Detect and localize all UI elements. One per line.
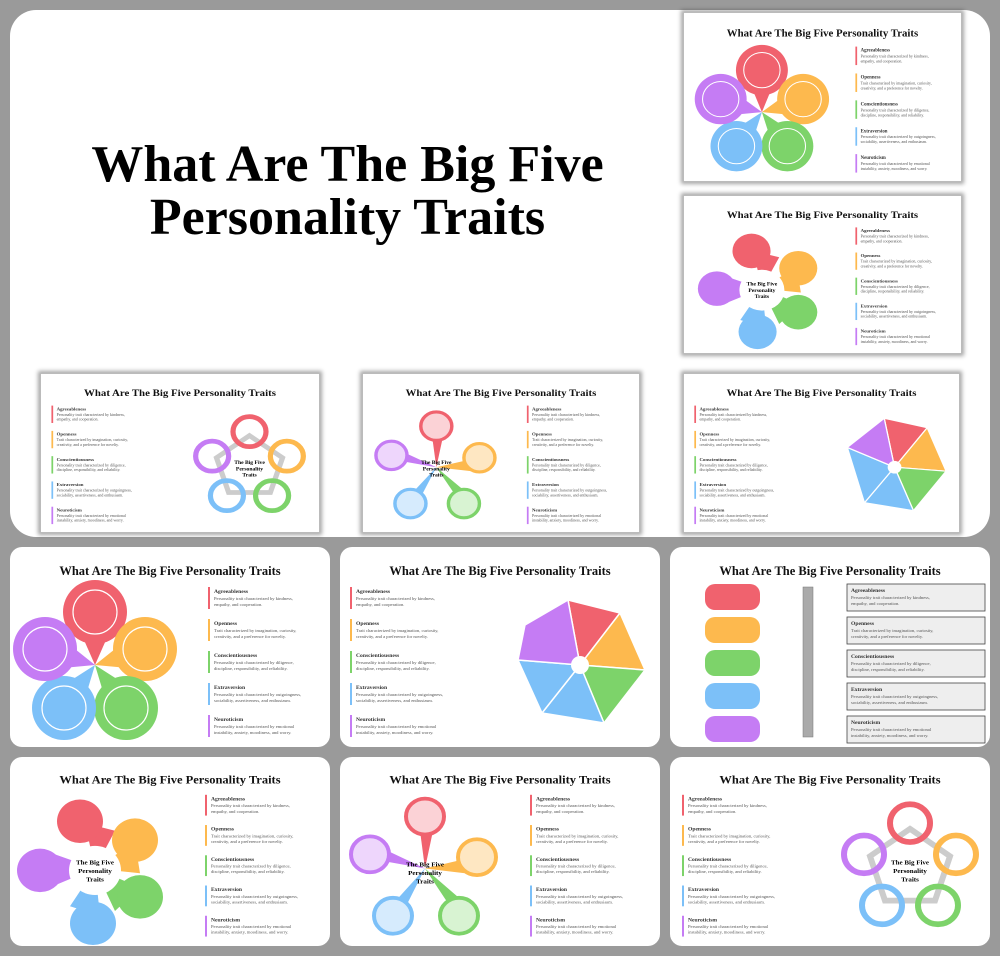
thumbnail 3: rings: What Are The Big Five Personality Traits bbox=[84, 389, 276, 399]
card 2: pentagon: sociability, assertiveness, and enthusiasm. bbox=[356, 698, 433, 704]
card 2: pentagon: Openness bbox=[356, 621, 380, 627]
thumbnail 1: petals bbox=[683, 12, 962, 182]
card 2: pentagon bbox=[340, 547, 660, 747]
card 6: rings: sociability, assertiveness, and enthusiasm. bbox=[688, 900, 765, 905]
card 2: pentagon: Personality trait characterized by kindness, bbox=[356, 596, 435, 602]
thumbnail 2: swirl: Traits bbox=[755, 294, 769, 300]
card 5: tailed circles: Extraversion bbox=[536, 887, 567, 893]
thumbnail 2: swirl: creativity, and a preference for novelty. bbox=[861, 265, 923, 269]
card 3: tabs: Conscientiousness bbox=[851, 654, 895, 660]
thumbnail 3: rings: Neuroticism bbox=[57, 509, 82, 513]
card 4: swirl: Personality bbox=[78, 868, 112, 875]
card 6: rings: creativity, and a preference for novelty. bbox=[688, 839, 760, 845]
thumbnail 1: petals: Personality trait characterized by outgoingness, bbox=[861, 135, 936, 140]
card 6: rings: Neuroticism bbox=[688, 918, 718, 923]
thumbnail 2: swirl: Conscientiousness bbox=[861, 279, 898, 283]
thumbnail 2: swirl: Personality trait characterized by emotional bbox=[861, 335, 930, 339]
thumbnail 2: swirl: The Big Five bbox=[747, 282, 778, 287]
thumbnail 5: pentagon: Personality trait characterized by kindness, bbox=[699, 413, 767, 418]
card 6: rings: Personality trait characterized by kindness, bbox=[688, 803, 767, 809]
card 3: tabs: instability, anxiety, moodiness, and worry. bbox=[851, 733, 928, 739]
thumbnail 5: pentagon: Neuroticism bbox=[699, 508, 725, 512]
thumbnail 2: swirl: sociability, assertiveness, and enthusiasm. bbox=[861, 315, 927, 320]
card 2: pentagon: Neuroticism bbox=[356, 717, 385, 723]
thumbnail 3: rings: empathy, and cooperation. bbox=[57, 418, 99, 423]
card 5: tailed circles: sociability, assertiveness, and enthusiasm. bbox=[536, 900, 613, 905]
thumbnail 4: tailed circles: Conscientiousness bbox=[532, 458, 570, 463]
main title: What Are The Big Five bbox=[91, 136, 604, 193]
card 1: petals: Extraversion bbox=[214, 685, 246, 691]
card 5: tailed circles: Personality trait characterized by kindness, bbox=[536, 803, 615, 809]
thumbnail 2: swirl bbox=[683, 195, 962, 354]
thumbnail 3: rings: Conscientiousness bbox=[57, 458, 94, 463]
thumbnail 3: rings: Personality trait characterized by emotional bbox=[57, 514, 126, 518]
thumbnail 4: tailed circles: empathy, and cooperation. bbox=[532, 418, 574, 423]
card 5: tailed circles: Neuroticism bbox=[536, 918, 566, 923]
card 2: pentagon: creativity, and a preference for novelty. bbox=[356, 634, 428, 640]
thumbnail 3: rings: Agreeableness bbox=[57, 407, 86, 412]
thumbnail 5: pentagon: What Are The Big Five Personality Traits bbox=[727, 388, 916, 399]
card 2: pentagon: discipline, responsibility, and reliability. bbox=[356, 666, 430, 672]
card 5: tailed circles: empathy, and cooperation. bbox=[536, 809, 584, 815]
thumbnail 1: petals: instability, anxiety, moodiness, and worry. bbox=[861, 167, 927, 172]
card 4: swirl: Conscientiousness bbox=[211, 857, 254, 863]
card 1: petals bbox=[10, 547, 330, 747]
thumbnail 3: rings: creativity, and a preference for novelty. bbox=[57, 443, 119, 448]
card 3: tabs: empathy, and cooperation. bbox=[851, 601, 899, 607]
thumbnail 1: petals: Personality trait characterized by diligence, bbox=[861, 108, 929, 113]
card 4: swirl: Personality trait characterized by kindness, bbox=[211, 803, 290, 809]
card 4: swirl: Personality trait characterized by diligence, bbox=[211, 864, 291, 870]
thumbnail 4: tailed circles: Personality trait characterized by outgoingness, bbox=[532, 489, 607, 494]
thumbnail 3: rings: Extraversion bbox=[57, 483, 84, 488]
card 3: tabs: What Are The Big Five Personality Traits bbox=[719, 564, 941, 578]
card 6: rings: Conscientiousness bbox=[688, 857, 731, 863]
thumbnail 4: tailed circles: Trait characterized by imagination, curiosity, bbox=[532, 438, 603, 443]
thumbnail 1: petals: Extraversion bbox=[861, 129, 888, 134]
thumbnail 2: swirl: empathy, and cooperation. bbox=[861, 239, 903, 244]
card 1: petals: Agreeableness bbox=[214, 589, 249, 595]
thumbnail 1: petals: Personality trait characterized by kindness, bbox=[861, 55, 929, 59]
thumbnail 1: petals: Agreeableness bbox=[861, 49, 890, 54]
thumbnail 5: pentagon: Personality trait characterized by outgoingness, bbox=[699, 489, 774, 494]
thumbnail 3: rings: Traits bbox=[242, 473, 257, 479]
thumbnail 5: pentagon: discipline, responsibility, and reliability. bbox=[699, 468, 763, 473]
card 5: tailed circles: instability, anxiety, moodiness, and worry. bbox=[536, 930, 613, 936]
card 3: tabs: Trait characterized by imagination, curiosity, bbox=[851, 628, 933, 634]
card 4: swirl: Agreeableness bbox=[211, 797, 245, 802]
card 1: petals: discipline, responsibility, and reliability. bbox=[214, 666, 288, 672]
thumbnail 2: swirl: What Are The Big Five Personality Traits bbox=[727, 210, 918, 221]
card 6: rings: Extraversion bbox=[688, 887, 719, 893]
card 6: rings: Openness bbox=[688, 827, 711, 833]
thumbnail 5: pentagon: sociability, assertiveness, and enthusiasm. bbox=[699, 494, 766, 498]
thumbnail 1: petals: creativity, and a preference for novelty. bbox=[861, 86, 923, 91]
card 6: rings: empathy, and cooperation. bbox=[688, 809, 736, 815]
card 3: tabs: creativity, and a preference for novelty. bbox=[851, 634, 923, 640]
card 4: swirl bbox=[10, 757, 330, 946]
thumbnail 2: swirl: discipline, responsibility, and reliability. bbox=[861, 290, 924, 294]
card 5: tailed circles: Personality bbox=[408, 870, 442, 877]
thumbnail 5: pentagon: Conscientiousness bbox=[699, 457, 737, 462]
card 4: swirl: Personality trait characterized by emotional bbox=[211, 924, 292, 929]
thumbnail 5: pentagon: Openness bbox=[699, 432, 719, 437]
thumbnail 2: swirl: instability, anxiety, moodiness, and worry. bbox=[861, 340, 928, 345]
card 3: tabs: Personality trait characterized by emotional bbox=[851, 727, 932, 732]
card 4: swirl: Traits bbox=[86, 877, 104, 884]
card 5: tailed circles bbox=[340, 757, 660, 946]
thumbnail 4: tailed circles: Personality trait characterized by kindness, bbox=[532, 413, 600, 418]
thumbnail 2: swirl: Personality bbox=[748, 288, 776, 294]
thumbnail 1: petals: discipline, responsibility, and reliability. bbox=[861, 113, 924, 118]
thumbnail 4: tailed circles: The Big Five bbox=[421, 460, 452, 466]
card 1: petals: Personality trait characterized by emotional bbox=[214, 724, 295, 729]
card 4: swirl: sociability, assertiveness, and enthusiasm. bbox=[211, 900, 288, 905]
card 2: pentagon: instability, anxiety, moodiness, and worry. bbox=[356, 730, 433, 736]
thumbnail 4: tailed circles: Personality bbox=[423, 467, 450, 472]
card 6: rings: discipline, responsibility, and reliability. bbox=[688, 869, 762, 875]
card 6: rings: Personality trait characterized by emotional bbox=[688, 924, 769, 929]
thumbnail 4: tailed circles: instability, anxiety, moodiness, and worry. bbox=[532, 519, 599, 524]
card 5: tailed circles: Personality trait characterized by outgoingness, bbox=[536, 894, 623, 900]
card 5: tailed circles: Traits bbox=[416, 879, 434, 886]
card 6: rings: Personality bbox=[893, 868, 927, 875]
card 1: petals: Openness bbox=[214, 621, 238, 627]
thumbnail 3: rings bbox=[40, 373, 320, 533]
card 3: tabs: Extraversion bbox=[851, 687, 883, 693]
card 6: rings: Agreeableness bbox=[688, 797, 722, 802]
card 1: petals: Personality trait characterized by diligence, bbox=[214, 660, 294, 666]
thumbnail 5: pentagon: empathy, and cooperation. bbox=[699, 418, 741, 423]
thumbnail 4: tailed circles: Personality trait characterized by diligence, bbox=[532, 464, 601, 468]
card 5: tailed circles: Conscientiousness bbox=[536, 857, 579, 863]
card 2: pentagon: Personality trait characterized by outgoingness, bbox=[356, 692, 443, 698]
card 3: tabs: Neuroticism bbox=[851, 720, 880, 726]
thumbnail 4: tailed circles: creativity, and a preference for novelty. bbox=[532, 443, 594, 448]
card 1: petals: Conscientiousness bbox=[214, 653, 258, 659]
thumbnail 2: swirl: Extraversion bbox=[861, 304, 888, 308]
thumbnail 2: swirl: Agreeableness bbox=[861, 228, 890, 233]
card 6: rings: Personality trait characterized by outgoingness, bbox=[688, 894, 775, 900]
card 1: petals: Personality trait characterized by kindness, bbox=[214, 596, 293, 602]
card 4: swirl: Personality trait characterized by outgoingness, bbox=[211, 894, 298, 900]
card 1: petals: Neuroticism bbox=[214, 717, 243, 723]
main panel bbox=[10, 10, 990, 537]
thumbnail 4: tailed circles bbox=[362, 373, 640, 533]
card 3: tabs: discipline, responsibility, and reliability. bbox=[851, 667, 925, 673]
thumbnail 5: pentagon: Trait characterized by imagination, curiosity, bbox=[699, 438, 770, 443]
thumbnail 3: rings: Personality trait characterized by outgoingness, bbox=[57, 489, 132, 494]
card 5: tailed circles: Personality trait characterized by emotional bbox=[536, 924, 617, 929]
thumbnail 1: petals: Personality trait characterized by emotional bbox=[861, 162, 930, 166]
main title: Personality Traits bbox=[150, 189, 545, 246]
card 6: rings: Traits bbox=[901, 877, 919, 884]
thumbnail 3: rings: discipline, responsibility, and reliability. bbox=[57, 468, 120, 473]
card 4: swirl: Neuroticism bbox=[211, 918, 241, 923]
card 5: tailed circles: discipline, responsibility, and reliability. bbox=[536, 869, 610, 875]
thumbnail 5: pentagon: Extraversion bbox=[699, 482, 727, 487]
card 3: tabs: sociability, assertiveness, and enthusiasm. bbox=[851, 700, 928, 706]
thumbnail 3: rings: Personality bbox=[236, 467, 263, 472]
thumbnail 1: petals: Conscientiousness bbox=[861, 102, 898, 107]
card 4: swirl: Openness bbox=[211, 827, 234, 833]
thumbnail 3: rings: sociability, assertiveness, and enthusiasm. bbox=[57, 494, 123, 498]
thumbnail 3: rings: Personality trait characterized by diligence, bbox=[57, 464, 126, 468]
card 1: petals: empathy, and cooperation. bbox=[214, 602, 262, 608]
card 6: rings: The Big Five bbox=[891, 860, 929, 867]
card 6: rings bbox=[670, 757, 990, 946]
card 2: pentagon: Personality trait characterized by emotional bbox=[356, 724, 437, 729]
main title bbox=[91, 136, 604, 246]
thumbnail 2: swirl: Openness bbox=[861, 253, 881, 258]
card 2: pentagon: Personality trait characterized by diligence, bbox=[356, 660, 436, 666]
thumbnail 4: tailed circles: Extraversion bbox=[532, 483, 559, 488]
thumbnail 4: tailed circles: What Are The Big Five Personality Traits bbox=[406, 388, 596, 399]
thumbnail 1: petals: Neuroticism bbox=[861, 156, 886, 161]
card 2: pentagon: Agreeableness bbox=[356, 589, 391, 595]
thumbnail 4: tailed circles: Traits bbox=[429, 473, 443, 479]
thumbnail 5: pentagon bbox=[683, 373, 960, 533]
card 1: petals: Trait characterized by imagination, curiosity, bbox=[214, 628, 296, 634]
card 1: petals: What Are The Big Five Personality Traits bbox=[59, 564, 281, 578]
thumbnail 4: tailed circles: discipline, responsibility, and reliability. bbox=[532, 468, 596, 473]
thumbnail 2: swirl: Personality trait characterized by kindness, bbox=[861, 235, 929, 240]
card 4: swirl: Trait characterized by imagination, curiosity, bbox=[211, 833, 293, 839]
thumbnail 1: petals: Trait characterized by imagination, curiosity, bbox=[861, 81, 932, 86]
thumbnail 5: pentagon: instability, anxiety, moodiness, and worry. bbox=[699, 519, 766, 524]
card 2: pentagon: Extraversion bbox=[356, 685, 388, 691]
thumbnail 2: swirl: Personality trait characterized by outgoingness, bbox=[861, 310, 936, 315]
thumbnail 1: petals: Openness bbox=[861, 76, 881, 80]
card 5: tailed circles: Trait characterized by imagination, curiosity, bbox=[536, 833, 618, 839]
thumbnail 5: pentagon: creativity, and a preference for novelty. bbox=[699, 443, 761, 448]
thumbnail 1: petals: empathy, and cooperation. bbox=[861, 60, 902, 65]
card 5: tailed circles: Agreeableness bbox=[536, 797, 570, 802]
card 4: swirl: instability, anxiety, moodiness, and worry. bbox=[211, 930, 288, 936]
card 6: rings: What Are The Big Five Personality Traits bbox=[719, 773, 941, 786]
thumbnail 1: petals: sociability, assertiveness, and enthusiasm. bbox=[861, 140, 927, 145]
thumbnail 1: petals: What Are The Big Five Personality Traits bbox=[727, 29, 918, 39]
card 4: swirl: discipline, responsibility, and reliability. bbox=[211, 869, 285, 875]
thumbnail 2: swirl: Trait characterized by imagination, curiosity, bbox=[861, 260, 932, 265]
thumbnail 4: tailed circles: Personality trait characterized by emotional bbox=[532, 514, 601, 518]
thumbnail 5: pentagon: Personality trait characterized by diligence, bbox=[699, 464, 768, 468]
card 2: pentagon: empathy, and cooperation. bbox=[356, 602, 404, 608]
card 5: tailed circles: Personality trait characterized by diligence, bbox=[536, 864, 616, 870]
card 6: rings: Personality trait characterized by diligence, bbox=[688, 864, 768, 870]
card 5: tailed circles: What Are The Big Five Personality Traits bbox=[389, 773, 611, 786]
card 4: swirl: The Big Five bbox=[76, 860, 114, 867]
card 4: swirl: What Are The Big Five Personality Traits bbox=[59, 773, 281, 786]
card 3: tabs bbox=[670, 547, 990, 747]
card 2: pentagon: What Are The Big Five Personality Traits bbox=[389, 564, 611, 578]
card 1: petals: Personality trait characterized by outgoingness, bbox=[214, 692, 301, 698]
card 5: tailed circles: The Big Five bbox=[406, 862, 444, 869]
thumbnail 2: swirl: Personality trait characterized by diligence, bbox=[861, 285, 930, 290]
thumbnail 5: pentagon: Agreeableness bbox=[699, 407, 729, 411]
card 5: tailed circles: Openness bbox=[536, 827, 559, 833]
thumbnail 3: rings: Personality trait characterized by kindness, bbox=[57, 413, 125, 418]
card 4: swirl: empathy, and cooperation. bbox=[211, 809, 259, 815]
thumbnail 4: tailed circles: Openness bbox=[532, 433, 552, 438]
thumbnail 3: rings: instability, anxiety, moodiness, and worry. bbox=[57, 519, 124, 524]
card 3: tabs: Personality trait characterized by kindness, bbox=[851, 595, 930, 601]
thumbnail 3: rings: Trait characterized by imagination, curiosity, bbox=[57, 438, 128, 443]
card 4: swirl: creativity, and a preference for novelty. bbox=[211, 839, 283, 845]
card 2: pentagon: Trait characterized by imagination, curiosity, bbox=[356, 628, 438, 634]
card 1: petals: creativity, and a preference for novelty. bbox=[214, 634, 286, 640]
card 1: petals: instability, anxiety, moodiness, and worry. bbox=[214, 730, 291, 736]
card 6: rings: instability, anxiety, moodiness, and worry. bbox=[688, 930, 765, 936]
thumbnail 3: rings: The Big Five bbox=[234, 460, 265, 466]
thumbnail 3: rings: Openness bbox=[57, 433, 77, 438]
card 2: pentagon: Conscientiousness bbox=[356, 653, 400, 659]
thumbnail 2: swirl: Neuroticism bbox=[861, 329, 886, 334]
card 4: swirl: Extraversion bbox=[211, 887, 242, 893]
card 3: tabs: Openness bbox=[851, 621, 875, 627]
card 3: tabs: Personality trait characterized by outgoingness, bbox=[851, 694, 938, 700]
card 6: rings: Trait characterized by imagination, curiosity, bbox=[688, 833, 770, 839]
card 5: tailed circles: creativity, and a preference for novelty. bbox=[536, 839, 608, 845]
thumbnail 4: tailed circles: Neuroticism bbox=[532, 509, 557, 513]
card 3: tabs: Agreeableness bbox=[851, 588, 886, 594]
card 1: petals: sociability, assertiveness, and enthusiasm. bbox=[214, 698, 291, 704]
thumbnail 4: tailed circles: sociability, assertiveness, and enthusiasm. bbox=[532, 494, 598, 498]
thumbnail 5: pentagon: Personality trait characterized by emotional bbox=[699, 514, 768, 518]
card 3: tabs: Personality trait characterized by diligence, bbox=[851, 661, 931, 667]
thumbnail 4: tailed circles: Agreeableness bbox=[532, 407, 562, 412]
